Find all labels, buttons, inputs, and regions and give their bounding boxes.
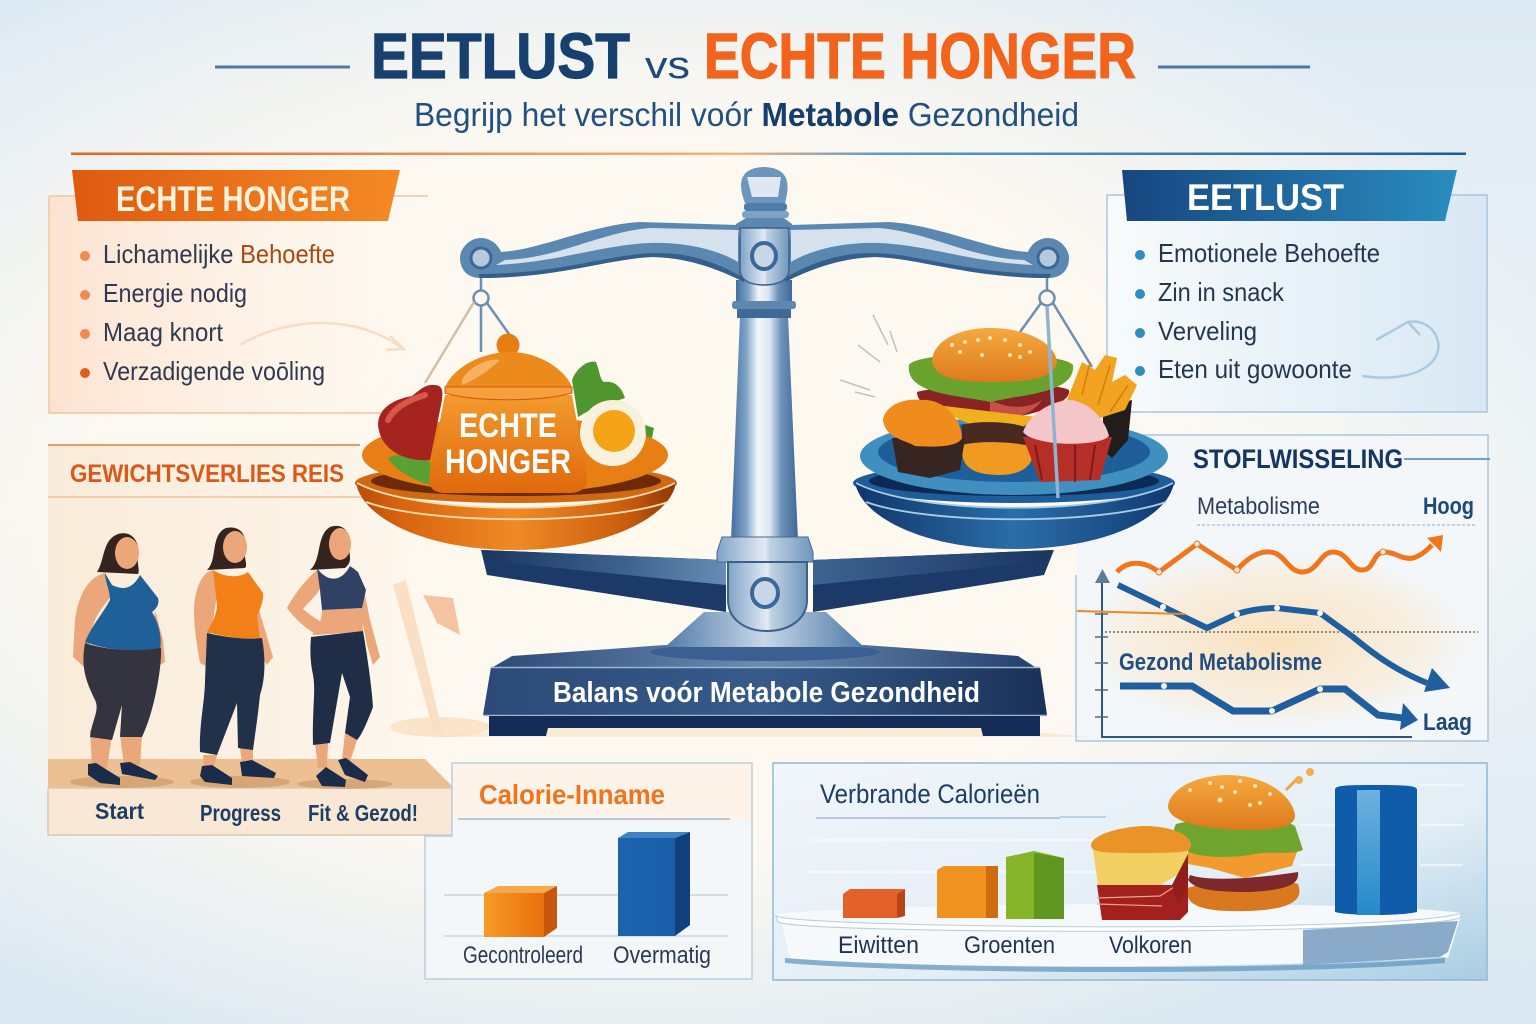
labels: categories: Volkoren <box>1109 932 1192 959</box>
labels: stages <box>95 798 418 826</box>
bar: eiwitten <box>843 889 905 918</box>
bar: gecontroleerd <box>484 886 557 937</box>
scale base: Balans voór Metabole Gezondheid <box>553 677 980 709</box>
left plate <box>362 417 668 493</box>
title: vs <box>645 45 690 87</box>
label: gezond metabolisme: Gezond Metabolisme <box>1119 649 1322 676</box>
column collar <box>732 280 796 318</box>
labels: categories: Eiwitten <box>838 932 919 959</box>
list: eetlust: Eten uit gowoonte <box>1158 354 1352 384</box>
tray <box>776 904 1462 972</box>
labels: categories: Groenten <box>964 932 1055 959</box>
panel: calorie-inname <box>425 763 752 979</box>
food: muffin <box>1091 826 1191 920</box>
list: echte honger: Energie nodig <box>103 278 247 308</box>
list: eetlust: Verveling <box>1158 316 1257 346</box>
right bowl <box>855 482 1174 549</box>
pedestal <box>650 612 880 661</box>
title <box>215 20 1310 92</box>
scale base <box>440 645 1090 737</box>
figure: fit <box>287 526 393 789</box>
labels: categories <box>838 932 1192 959</box>
lower arm right <box>813 550 1054 612</box>
left bowl <box>356 482 676 550</box>
beam <box>460 222 1069 282</box>
title: ECHTE HONGER <box>704 20 1136 92</box>
food: healthy: ECHTE <box>459 407 557 445</box>
list: echte honger <box>80 239 335 386</box>
bar: overmatig <box>618 832 690 936</box>
bar: volkoren <box>1006 851 1064 919</box>
right plate <box>860 417 1168 495</box>
lower arm left <box>481 550 726 612</box>
labels: stages: Progress <box>200 800 281 826</box>
panel: gewichtsverlies reis <box>48 445 490 835</box>
chains <box>425 278 1092 383</box>
floor band <box>48 759 452 789</box>
bar: tall blue <box>1335 785 1417 915</box>
column head <box>736 167 792 285</box>
arrow: decorative blue <box>1362 322 1438 378</box>
impact marks <box>840 315 897 397</box>
scale <box>355 167 1175 737</box>
labels: stages: Fit & Gezod! <box>308 800 418 826</box>
label strip <box>48 788 452 835</box>
labels: stages: Start <box>95 798 144 824</box>
heading: eetlust: EETLUST <box>1187 177 1344 218</box>
lower collar and joint <box>717 537 813 631</box>
subtitle: Begrijp het verschil voór Metabole Gezondheid <box>414 96 1079 133</box>
label: hoog: Hoog <box>1423 493 1474 520</box>
column <box>731 316 798 540</box>
right pan <box>853 306 1175 549</box>
food: healthy: HONGER <box>445 443 571 481</box>
labels: bars: Overmatig <box>613 942 711 969</box>
labels: bars <box>463 942 711 969</box>
arrow: decorative orange <box>240 323 404 350</box>
panel: eetlust <box>1107 170 1487 412</box>
panel: echte honger <box>49 170 430 413</box>
heading: gewichtsverlies: GEWICHTSVERLIES REIS <box>70 460 344 488</box>
labels: bars: Gecontroleerd <box>463 942 583 969</box>
list: eetlust <box>1135 238 1380 384</box>
heading: verbrande: Verbrande Calorieën <box>820 779 1040 809</box>
food: healthy <box>378 334 654 493</box>
title: EETLUST <box>371 20 630 92</box>
list: echte honger: Maag knort <box>103 317 224 347</box>
list: echte honger: Verzadigende voōling <box>103 356 325 386</box>
heading: stofwisseling: STOFLWISSELING <box>1193 444 1403 474</box>
heading: eetlust <box>1122 170 1457 221</box>
left pan <box>355 334 677 550</box>
list: echte honger: Lichamelijke Behoefte <box>103 239 335 269</box>
panel: stofwisseling <box>1075 435 1490 741</box>
list: eetlust: Emotionele Behoefte <box>1158 238 1380 268</box>
center chain <box>1047 306 1058 498</box>
bar: groenten <box>937 866 998 918</box>
food: burger <box>1168 768 1314 911</box>
figure: start <box>70 533 174 788</box>
arrow: progress up <box>390 580 490 737</box>
heading: calorie-inname: Calorie-Inname <box>479 779 665 810</box>
heading: echte honger: ECHTE HONGER <box>116 180 350 219</box>
list: eetlust: Zin in snack <box>1158 277 1285 307</box>
label: laag: Laag <box>1423 709 1472 736</box>
figure: progress <box>190 527 290 788</box>
heading: echte honger <box>72 170 400 221</box>
line chart <box>1077 535 1478 737</box>
food: fast food <box>883 328 1137 482</box>
label: metabolisme: Metabolisme <box>1197 493 1320 520</box>
panel: verbrande calorieen <box>773 763 1487 980</box>
